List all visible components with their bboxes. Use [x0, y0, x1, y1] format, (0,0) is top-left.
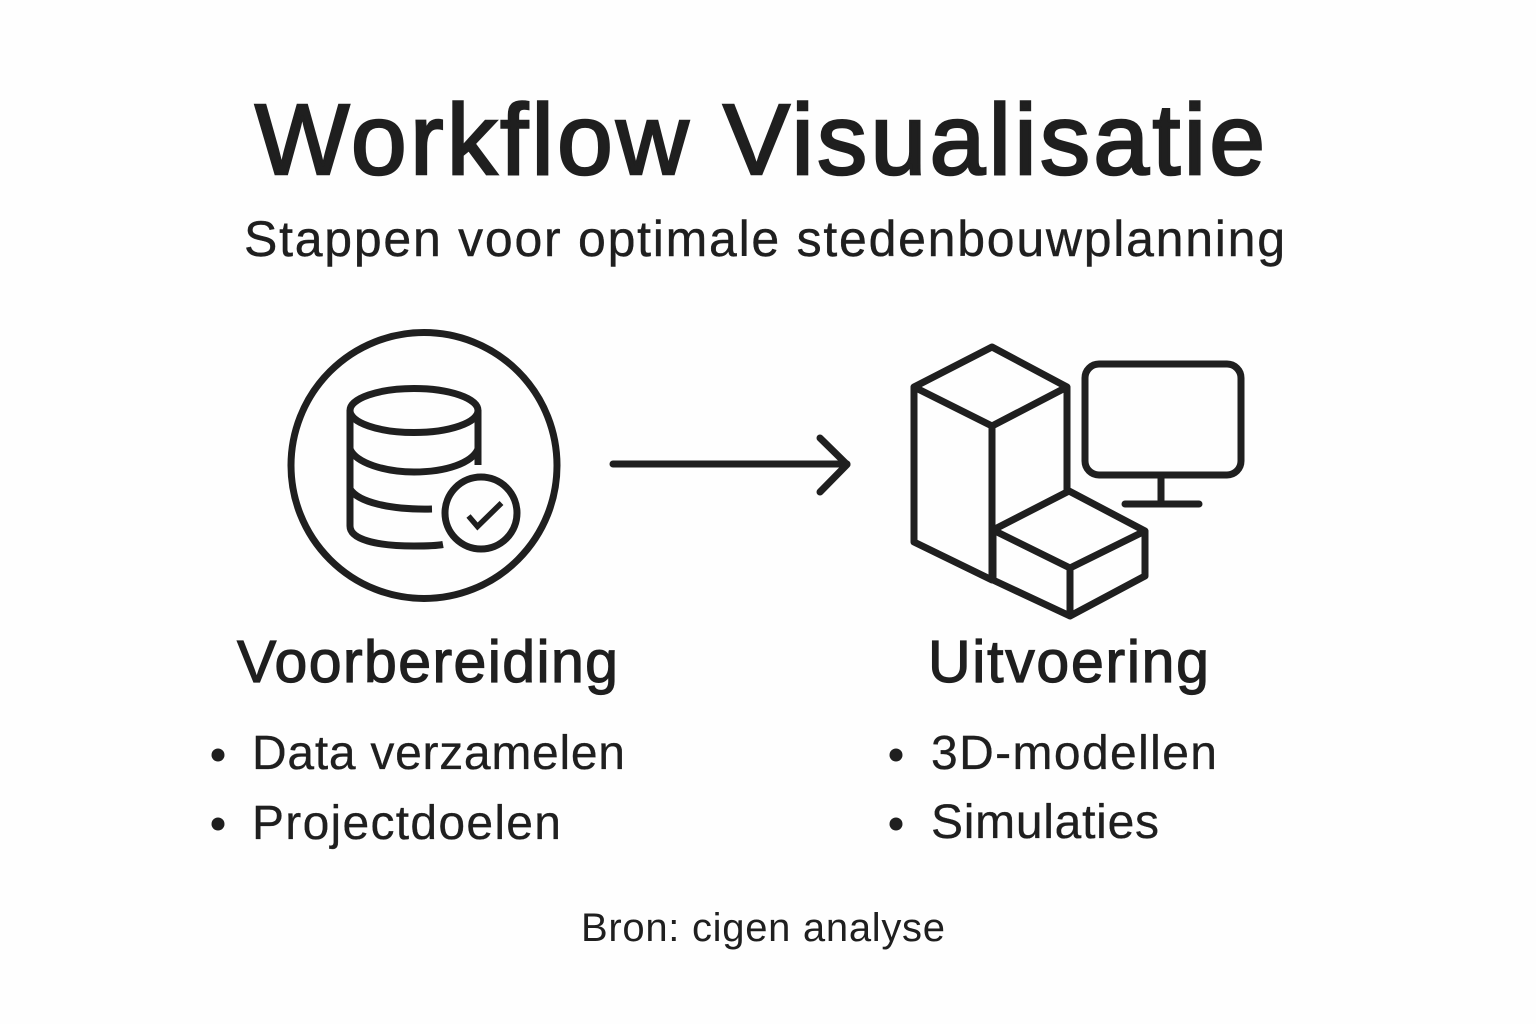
arrow — [613, 438, 847, 492]
subtitle: Stappen voor optimale stedenbouwplanning — [244, 211, 1285, 267]
icon: database with check in circle — [291, 332, 557, 598]
list: Uitvoering: Simulaties — [931, 796, 1159, 849]
list: Voorbereiding — [212, 727, 625, 850]
list: Uitvoering: 3D-modellen — [931, 727, 1217, 780]
source note: Bron: cigen analyse — [581, 906, 945, 950]
monitor — [1085, 364, 1241, 504]
list: Voorbereiding: Projectdoelen — [252, 797, 561, 850]
heading: Voorbereiding: Voorbereiding — [237, 629, 618, 695]
list: Voorbereiding: Data verzamelen — [252, 727, 625, 780]
tall block — [914, 347, 1067, 580]
list: Uitvoering — [890, 727, 1217, 849]
icon: 3D blocks and monitor — [914, 347, 1241, 616]
low block — [993, 491, 1145, 616]
heading: Uitvoering: Uitvoering — [928, 629, 1209, 695]
title: Workflow Visualisatie — [255, 84, 1265, 196]
